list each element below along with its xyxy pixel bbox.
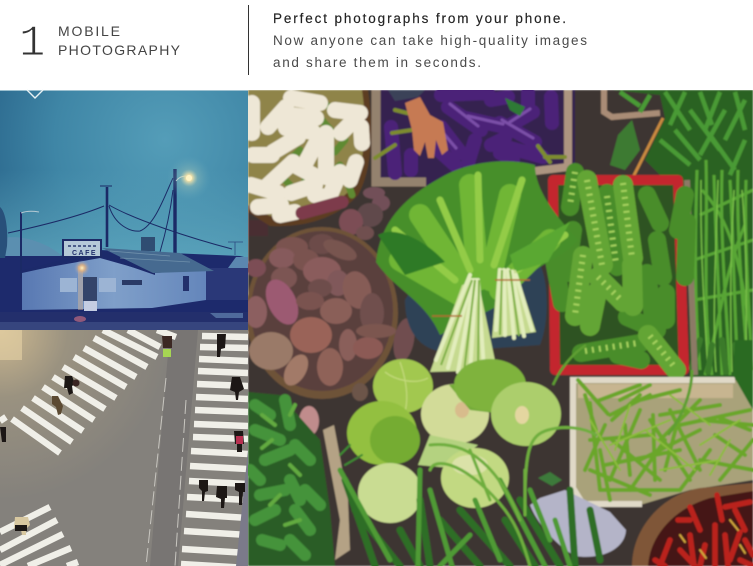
leafy greens bundle [376, 161, 578, 372]
grass blades [340, 428, 600, 566]
pedestrians [0, 334, 245, 535]
eggplant crate [372, 90, 575, 186]
ground and loose potatoes [248, 187, 403, 274]
section title: MOBILE [58, 23, 120, 39]
crosswalk stripes diagonal [0, 330, 176, 453]
description text: Perfect photographs from your phone. [273, 11, 566, 26]
description text [273, 11, 587, 70]
basket: white eggplants [248, 90, 371, 226]
crosswalk stripes lower left [0, 507, 78, 566]
photo: cafe at dusk [0, 90, 248, 330]
cafe sign [62, 239, 102, 258]
photo: pedestrian crossing [0, 330, 248, 566]
sweet potato basket [245, 227, 418, 436]
cafe building [20, 237, 214, 311]
crosswalk stripes right [181, 336, 248, 566]
photo: vegetable market [248, 90, 753, 566]
marker chevron [26, 90, 44, 99]
neighbouring building [228, 257, 248, 268]
description text: and share them in seconds. [273, 55, 481, 70]
paper strip [323, 425, 350, 560]
red crate with bitter melons [553, 172, 695, 385]
herbs [248, 392, 335, 566]
cabbages [347, 359, 561, 523]
concrete corner and stick [604, 90, 660, 117]
red sweet potato [302, 202, 342, 213]
eggplants [391, 93, 552, 173]
long beans and top greens [612, 90, 753, 378]
chilli basket [632, 483, 753, 566]
bean box [573, 340, 753, 505]
hand [388, 90, 448, 158]
header band [19, 5, 587, 75]
plastic bag [530, 490, 626, 557]
white stems [430, 280, 497, 372]
description text: Now anyone can take high-quality images [273, 33, 587, 48]
section number: 1 [19, 19, 45, 69]
utility poles and wires [8, 169, 243, 305]
section title: PHOTOGRAPHY [58, 42, 181, 58]
tub behind greens [405, 265, 547, 353]
cafe sign: CAFE [72, 250, 97, 257]
section title [58, 23, 181, 58]
ground and treeline [0, 250, 248, 330]
